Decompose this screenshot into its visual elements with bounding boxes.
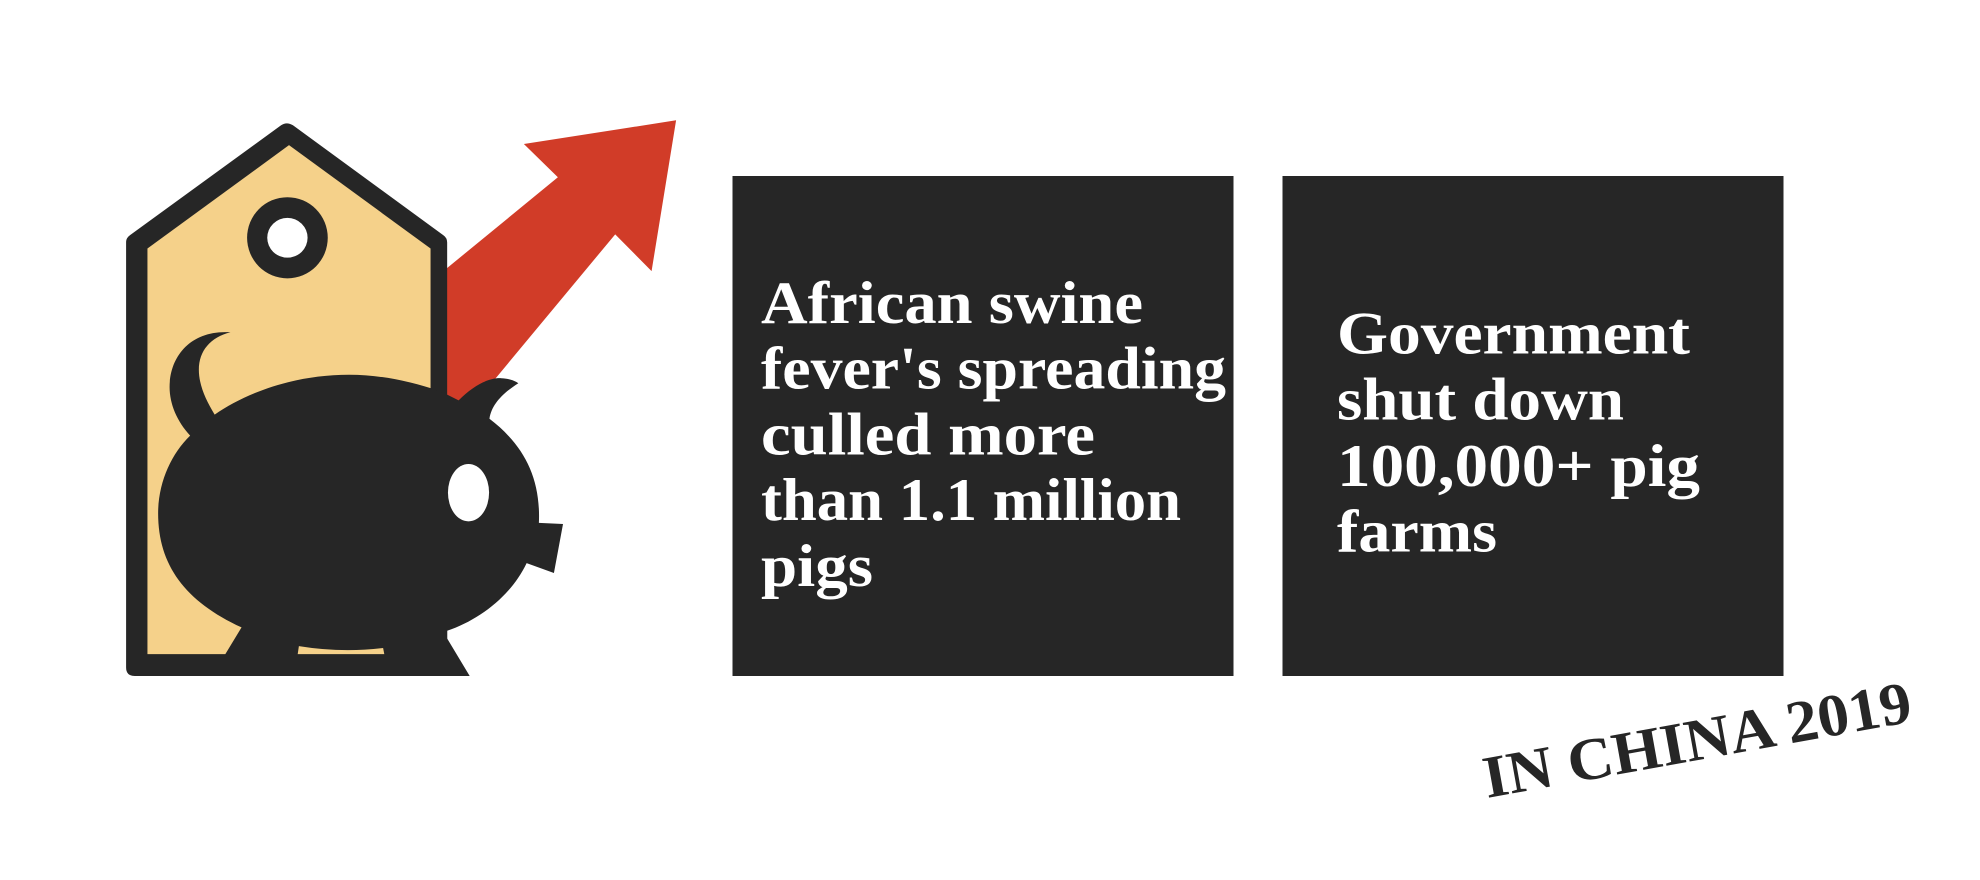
arrow: rising red arrow xyxy=(416,120,676,429)
panel text: farms shut down: 100,000+ pig xyxy=(1337,433,1700,499)
panel text: culled pigs xyxy=(761,270,1226,599)
panel text: culled pigs: than 1.1 million xyxy=(761,467,1181,533)
panel text: farms shut down xyxy=(1337,300,1700,564)
pig eye xyxy=(448,464,489,521)
caption: in China 2019: IN CHINA 2019 xyxy=(1478,669,1916,811)
gap between pig legs xyxy=(298,646,384,654)
panel text: farms shut down: farms xyxy=(1337,498,1497,564)
panel: culled pigs xyxy=(732,176,1234,676)
panel text: farms shut down: Government xyxy=(1337,300,1690,366)
panel text: culled pigs: African swine xyxy=(761,270,1143,336)
panel text: culled pigs: culled more xyxy=(761,402,1095,468)
panel text: culled pigs: fever's spreading xyxy=(761,336,1226,402)
icon: pig silhouette xyxy=(158,332,563,676)
panel: farms shut down xyxy=(1282,176,1784,676)
panel text: culled pigs: pigs xyxy=(761,533,873,599)
icon: price tag xyxy=(126,123,447,676)
panel text: farms shut down: shut down xyxy=(1337,366,1624,432)
icon: rising price tag with pig xyxy=(126,120,676,676)
